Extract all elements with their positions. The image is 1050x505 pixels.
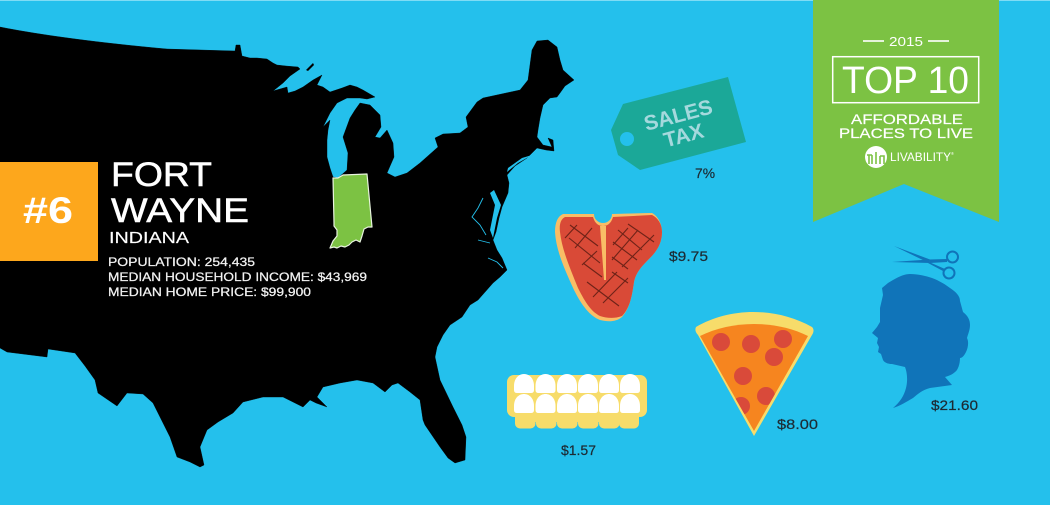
ribbon: top 10 badge: ® (951, 151, 954, 156)
icon: sales tax tag (611, 77, 746, 170)
icon: t-bone steak (555, 213, 662, 321)
ribbon: top 10 badge: PLACES TO LIVE (839, 125, 973, 141)
city heading: INDIANA (109, 230, 189, 247)
state highlight: Indiana (330, 174, 372, 248)
rank badge: #6 (23, 190, 73, 231)
icon: scissors (892, 246, 958, 278)
price: pizza: $8.00 (777, 416, 818, 432)
city heading: WAYNE (111, 192, 249, 230)
ribbon: top 10 badge (813, 0, 999, 222)
city statistics: MEDIAN HOUSEHOLD INCOME: $43,969 (108, 270, 367, 284)
price: eggs: $1.57 (561, 442, 596, 458)
price: steak: $9.75 (669, 248, 708, 264)
icon: woman silhouette (872, 274, 970, 408)
ribbon: top 10 badge: 2015 (889, 34, 923, 49)
city statistics: POPULATION: 254,435 (108, 255, 255, 269)
ribbon: top 10 badge: TOP 10 (842, 60, 969, 102)
city heading: FORT (111, 156, 212, 194)
price: haircut: $21.60 (931, 397, 978, 413)
ribbon: top 10 badge: AFFORDABLE (851, 111, 963, 127)
price: sales tax: 7% (695, 165, 715, 181)
map of the United States (0, 27, 574, 467)
icon: sales tax tag: SALES (642, 96, 715, 136)
ribbon: top 10 badge: LIVABILITY (890, 152, 951, 164)
city statistics (108, 255, 367, 299)
rank badge (0, 162, 98, 261)
city statistics: MEDIAN HOME PRICE: $99,900 (108, 285, 311, 299)
icon: egg carton (507, 374, 647, 428)
icon: pizza slice (695, 312, 814, 436)
icon: sales tax tag: TAX (661, 120, 706, 152)
city heading (109, 156, 249, 247)
